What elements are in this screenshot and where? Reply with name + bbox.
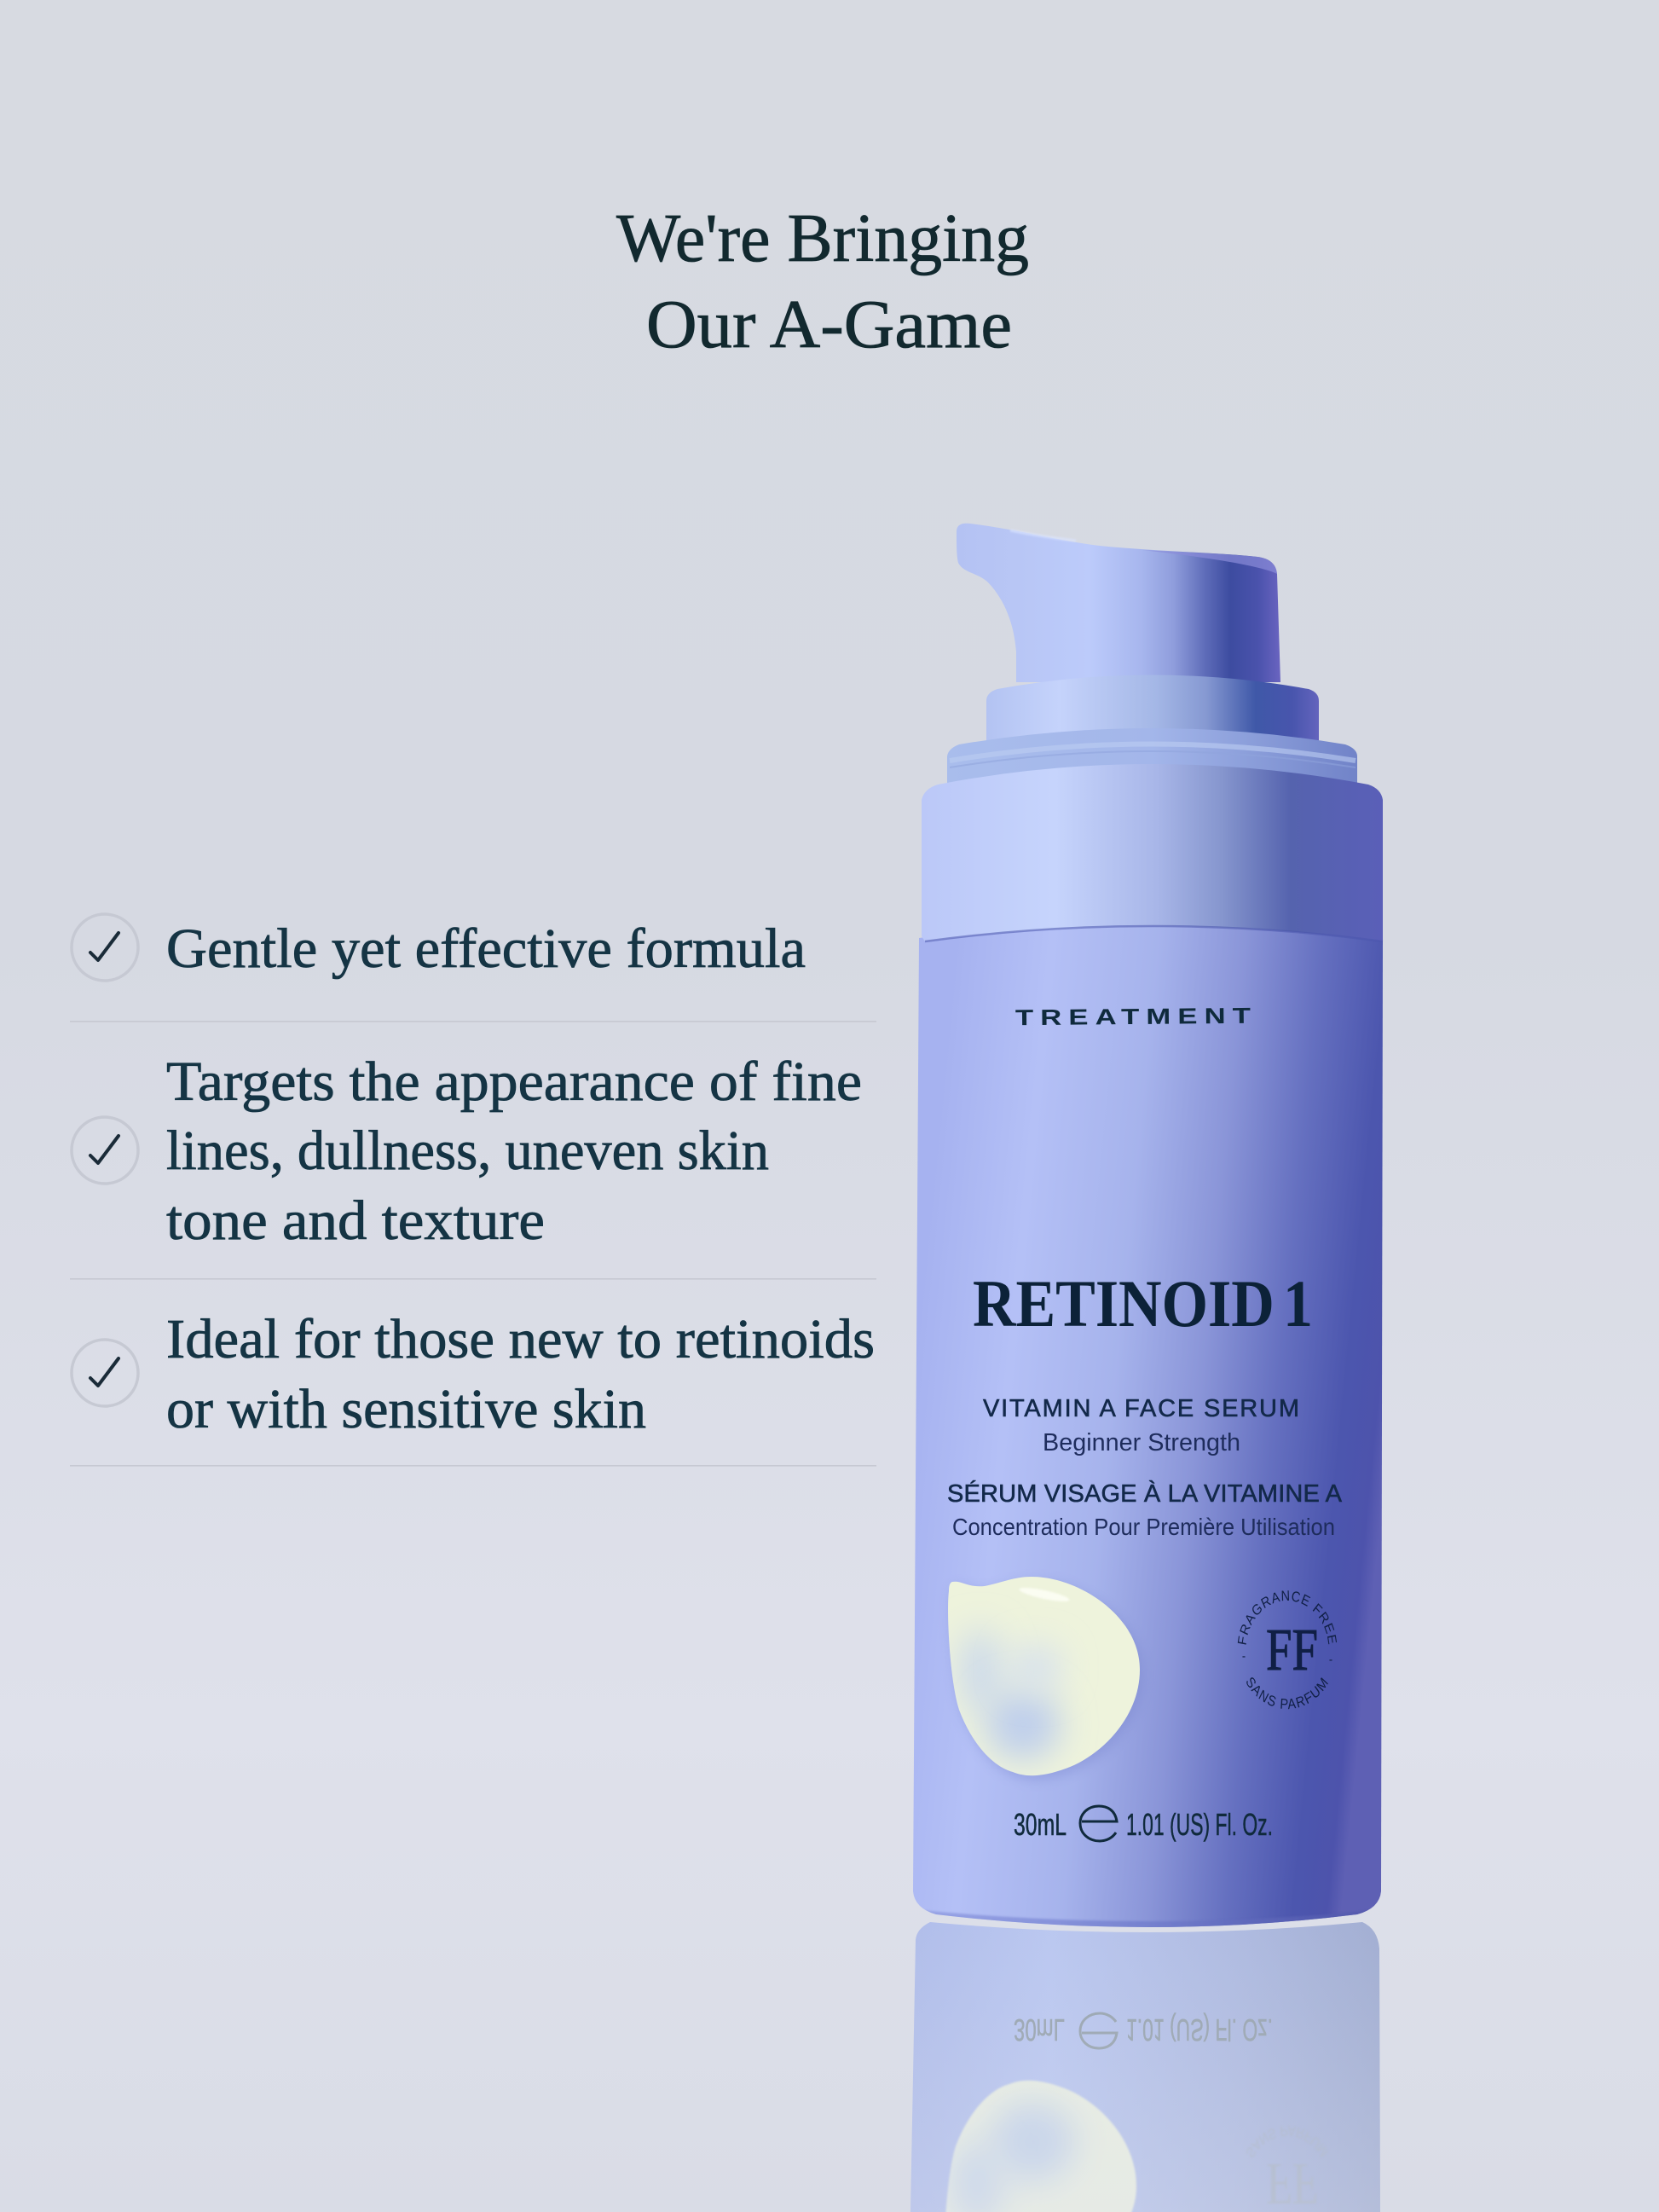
fragrance free badge: FRAGRANCE FREE — [1238, 1590, 1337, 1645]
label: product name: RETINOID 1 — [973, 1266, 1313, 1341]
cream swatch — [948, 1577, 1143, 1780]
label: descriptors — [947, 1395, 1343, 1540]
label: descriptors: Concentration Pour Première Utilisation — [952, 1514, 1335, 1540]
bottle — [913, 524, 1383, 1927]
threaded ring — [947, 728, 1357, 783]
volume text — [1014, 1806, 1273, 1842]
fragrance free badge: FF — [1266, 1618, 1318, 1683]
benefit: new to retinoids: or with sensitive skin — [166, 1378, 646, 1440]
pump highlight — [1010, 530, 1076, 541]
fragrance free badge — [1238, 1590, 1337, 1709]
pump head — [957, 524, 1280, 682]
benefit: targets fine lines: tone and texture — [166, 1190, 545, 1252]
fragrance free badge: SANS PARFUM — [1246, 1677, 1328, 1709]
label: descriptors: Beginner Strength — [1043, 1429, 1240, 1456]
bottle body — [904, 904, 1390, 1944]
icon: estimated sign — [1080, 1806, 1117, 1841]
benefit: new to retinoids — [72, 1308, 875, 1440]
title — [616, 201, 1029, 362]
reflected volume text — [1014, 2012, 1273, 2048]
reflected FF badge: SANS PARFUM — [1250, 2128, 1323, 2157]
benefit: targets fine lines: lines, dullness, uneven skin — [166, 1120, 769, 1182]
title: We're Bringing — [616, 201, 1029, 276]
reflected volume text: 30mL — [1014, 2012, 1065, 2047]
reflected FF badge — [1250, 2128, 1323, 2203]
pump top rim — [1142, 550, 1277, 574]
fragrance free badge: - — [1242, 1648, 1246, 1663]
bottle cap — [922, 764, 1383, 941]
pump collar — [986, 675, 1319, 746]
fragrance free badge: - — [1329, 1652, 1332, 1666]
benefit: targets fine lines: Targets the appearance of fine — [166, 1051, 862, 1113]
cap seam — [925, 926, 1383, 941]
benefits list — [70, 914, 876, 1467]
title: Our A-Game — [646, 287, 1012, 362]
benefit: gentle formula: Gentle yet effective formula — [166, 918, 806, 980]
bottle reflection — [910, 1922, 1380, 2212]
benefit: new to retinoids: Ideal for those new to retinoids — [166, 1308, 875, 1370]
reflected cream — [945, 2081, 1136, 2212]
reflected volume text: 1.01 (US) Fl. Oz. — [1126, 2012, 1273, 2047]
label: descriptors: SÉRUM VISAGE À LA VITAMINE A — [947, 1479, 1343, 1508]
label: treatment: TREATMENT — [1015, 1003, 1257, 1030]
benefit: targets fine lines — [72, 1051, 862, 1252]
volume text: 30mL — [1014, 1807, 1066, 1842]
label: descriptors: VITAMIN A FACE SERUM — [983, 1395, 1299, 1422]
volume text: 1.01 (US) Fl. Oz. — [1126, 1807, 1273, 1842]
